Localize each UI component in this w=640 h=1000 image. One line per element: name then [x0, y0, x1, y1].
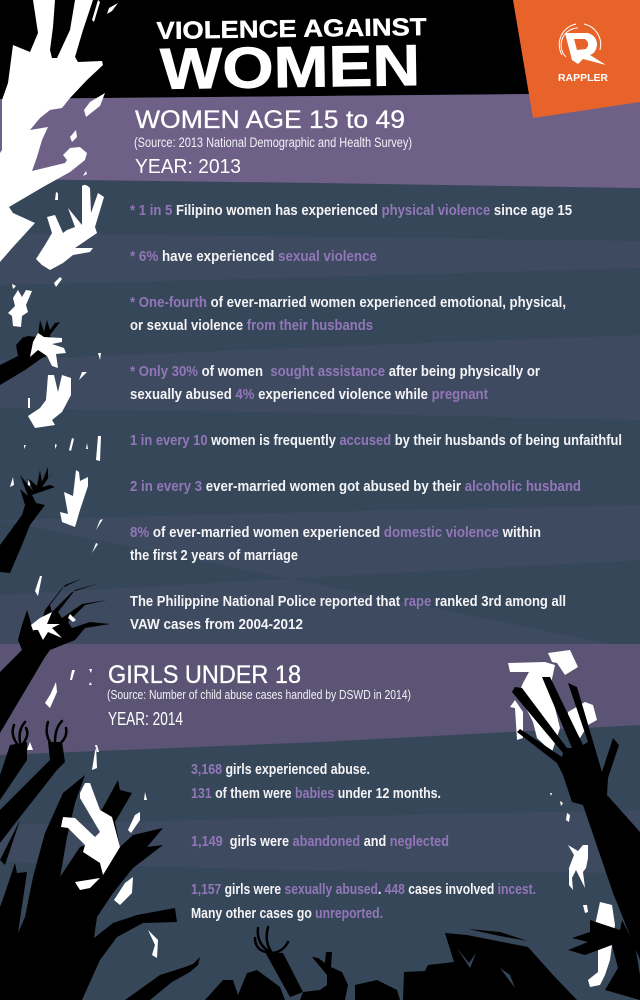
white arm top left — [0, 0, 103, 262]
stat: sexually abused — [191, 882, 536, 922]
stat: girls abuse — [191, 762, 441, 802]
stat: alcoholic: 2 in every 3 ever-married women got abused by their alcoholic husband — [130, 479, 581, 495]
stat: husbands: or sexual violence from their husbands — [130, 318, 373, 334]
stat: husbands: * One-fourth of ever-married women experienced emotional, physical, — [130, 295, 566, 311]
white hand bottom left — [61, 783, 158, 958]
title: WOMEN — [160, 33, 421, 102]
white hand falling — [36, 185, 104, 287]
stat: sexually abused: 1,157 girls were sexually abused. 448 cases involved incest. — [191, 882, 536, 898]
logo word: RAPPLER — [558, 73, 609, 84]
stat: sexually abused: Many other cases go unreported. — [191, 906, 383, 922]
stat: rape: The Philippine National Police reported that rape ranked 3rd among all — [130, 594, 566, 610]
white fragment on big hand — [31, 612, 76, 640]
stat: physical violence: * 1 in 5 Filipino women has experienced physical violence since age 15 — [130, 203, 572, 219]
stat: domestic violence: 8% of ever-married women experienced domestic violence within — [130, 525, 541, 541]
stat: domestic violence — [130, 525, 541, 564]
small white figure — [550, 793, 588, 890]
panel: girls band — [0, 644, 640, 755]
rappler logo — [558, 24, 609, 84]
year 2014: YEAR: 2014 — [108, 709, 183, 729]
title — [156, 14, 428, 102]
year 2013: YEAR: 2013 — [135, 156, 241, 178]
stat: rape — [130, 594, 566, 633]
white small specks — [27, 669, 99, 770]
stat: sexual violence: * 6% have experienced sexual violence — [130, 249, 377, 265]
stat: girls abuse: 3,168 girls experienced abuse. — [191, 762, 370, 778]
stat: assistance: * Only 30% of women sought assistance after being physically or — [130, 364, 540, 380]
stat: abandoned: 1,149 girls were abandoned and neglected — [191, 834, 449, 850]
white small hand — [8, 284, 32, 327]
white hand middle — [35, 470, 103, 596]
stat: domestic violence: the first 2 years of marriage — [130, 548, 298, 564]
white figure top right — [508, 650, 597, 752]
source: women: (Source: 2013 National Demographic and Health Survey) — [134, 135, 412, 150]
white specks column — [10, 353, 101, 488]
black hand with white fragment — [0, 320, 60, 385]
black arm right with hand — [512, 677, 640, 960]
stat: rape: VAW cases from 2004-2012 — [130, 617, 303, 633]
black mass bottom left — [0, 775, 177, 1000]
stat: accused: 1 in every 10 women is frequently accused by their husbands of being unfaithful — [130, 433, 622, 449]
header black band — [0, 0, 640, 99]
white figure right bottom — [583, 902, 615, 987]
title: VIOLENCE AGAINST — [156, 14, 427, 45]
panel: women age band — [0, 93, 640, 188]
fingers of raised hand — [255, 927, 288, 953]
stat: assistance — [130, 364, 540, 403]
black big hand — [0, 578, 110, 733]
black hand bottom center left — [125, 957, 200, 1000]
white fragment on hand — [30, 333, 66, 368]
stat: girls abuse: 131 of them were babies under 12 months. — [191, 786, 441, 802]
heading: girls: GIRLS UNDER 18 — [108, 661, 301, 689]
stat: assistance: sexually abused 4% experienced violence while pregnant — [130, 387, 488, 403]
black crowd bottom center — [205, 927, 577, 1000]
white hand lower — [28, 372, 87, 428]
stat: husbands — [130, 295, 566, 334]
white fragments top — [70, 0, 118, 176]
source: girls: (Source: Number of child abuse cases handled by DSWD in 2014) — [107, 687, 411, 702]
black hand middle left — [0, 467, 55, 573]
logo tab — [513, 0, 640, 118]
small black hands — [0, 721, 66, 865]
black hand right bottom — [568, 920, 640, 1000]
heading: women age: WOMEN AGE 15 to 49 — [135, 106, 405, 134]
